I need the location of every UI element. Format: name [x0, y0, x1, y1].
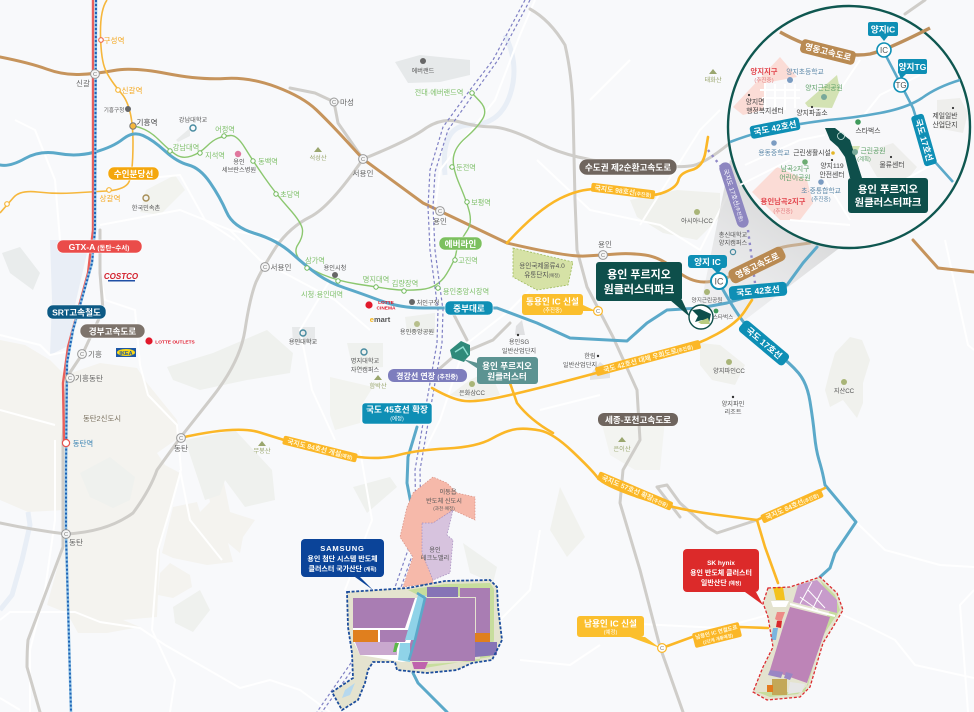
logo: Lotte Outlets — [145, 337, 196, 346]
logo: IKEA — [116, 348, 136, 357]
label: Sejong-Pocheon: 세종-포천고속도로 — [605, 414, 671, 425]
place labels: 리조트 — [724, 408, 742, 416]
interchange text — [69, 79, 612, 547]
Everline — [133, 93, 485, 290]
place labels: 양지근린공원 — [692, 296, 722, 304]
label: Yeongdong expressway — [727, 245, 787, 285]
logo: Costco: COSTCO — [104, 272, 139, 281]
label: Samsung: SAMSUNG — [320, 544, 365, 553]
road text bands — [282, 183, 824, 648]
label: Dongyongin IC: (추진중) — [543, 306, 562, 314]
label: Sejong-Pocheon — [598, 413, 678, 426]
interchange text: 용인 — [433, 216, 447, 226]
inset place labels: 초·중통합학교 — [801, 186, 841, 195]
label: Namyongin IC: 남용인 IC 신설 — [584, 618, 637, 628]
Gyeonggang line extension dashed — [317, 0, 530, 712]
inset place labels: 용동중학교 — [758, 148, 790, 157]
place labels: 아시아나CC — [681, 217, 713, 225]
stations: Everline: 어정역 — [215, 125, 235, 134]
land areas — [0, 55, 870, 633]
inset place labels: 근린공원 — [860, 146, 886, 155]
inset place labels: 물류센터 — [879, 160, 905, 169]
label: GTX-A: GTX-A (동탄~수서) — [69, 242, 129, 252]
logistics complex: 유통단지(예정) — [524, 270, 560, 279]
inset place labels: 용인남곡2지구 — [761, 197, 806, 206]
stations: Everline: 삼가역 — [305, 256, 325, 265]
label: Suin-Bundang line: 수인분당선 — [114, 168, 153, 179]
place labels: 용인 — [233, 159, 245, 166]
interchange text: 서용인 — [353, 168, 373, 178]
Dongtan station — [62, 439, 93, 448]
label: GTX-A — [57, 240, 142, 253]
road label: 84 east: 국지도 84호선(추진중) — [764, 490, 820, 522]
road label: Namyongin link: (2단계 개통예정) — [702, 632, 734, 646]
logo: Emart: emart — [370, 315, 391, 324]
label: SK hynix — [683, 549, 763, 605]
purple dotted road — [708, 150, 755, 283]
inset place labels: 스타벅스 — [855, 126, 881, 135]
label: Jungbu-daero: 중부대로 — [453, 302, 485, 314]
interchange markers: C — [68, 376, 72, 382]
inset place labels: (계획) — [857, 155, 871, 163]
stations: Everline: 명지대역 — [363, 275, 389, 284]
logo: Lotte Cinema: LOTTE — [378, 300, 395, 306]
yellow planned roads — [180, 137, 825, 648]
brand logos — [104, 272, 396, 357]
place labels: 은화삼CC — [459, 389, 486, 397]
label: Route 17 — [737, 319, 791, 367]
inset label: Yangji IC: 양지IC — [871, 24, 895, 34]
inset circle map — [728, 6, 970, 248]
label: SRT — [47, 305, 106, 319]
label: Yangji IC — [688, 255, 727, 274]
label: Namyongin IC: C — [660, 646, 664, 652]
inset place labels: 양지119 — [820, 161, 844, 170]
inset place labels: (추진중) — [811, 195, 831, 203]
road label: 84 west: 국지도 84호선 개설(예정) — [286, 437, 354, 462]
interchange markers: C — [80, 352, 84, 358]
inset marker: IC: IC — [880, 46, 888, 55]
interchange text: 기흥 — [88, 349, 102, 359]
label: main site on map: 용인 푸르지오 — [607, 268, 671, 281]
interchange text: 동탄 — [174, 443, 188, 453]
stations: Everline: 강남대역 — [173, 143, 199, 152]
label: Route 45: 국도 45호선 확장 — [366, 404, 428, 414]
logistics complex — [513, 248, 573, 290]
place labels — [104, 58, 855, 455]
interchange text: 신갈 — [76, 79, 90, 88]
place labels: 스타벅스 — [713, 313, 733, 321]
interchange markers: C — [263, 265, 267, 271]
place labels: 기흥구청 — [104, 106, 124, 114]
logo: Lotte Cinema — [365, 300, 396, 312]
interchange text: 마성 — [340, 98, 354, 107]
place labels: 양지파인 — [722, 400, 745, 408]
place labels: 무봉산 — [253, 447, 271, 455]
stations: Suin-Bundang — [5, 35, 157, 206]
interchange markers: C — [332, 100, 336, 106]
place labels: 양지캠퍼스 — [719, 239, 748, 247]
interchange markers: C — [438, 209, 442, 215]
interchange markers: C — [601, 253, 605, 259]
inset marker: IC — [877, 43, 891, 57]
stations: Everline: 용인중앙시장역 — [443, 287, 489, 296]
inset label: Yangji IC — [868, 22, 898, 41]
inset label: Route 17: 국도 17호선 — [913, 117, 936, 162]
inset label: Yeongdong — [799, 38, 857, 66]
Idong new town zone — [400, 477, 475, 587]
SK hynix cluster site — [753, 577, 843, 700]
label: local road 17 — [718, 161, 750, 229]
place labels: 용인SG — [509, 339, 529, 346]
marker: main site — [689, 305, 713, 329]
place labels: 세브란스병원 — [222, 166, 256, 174]
inset place labels: (추진중) — [773, 207, 793, 215]
label: Route 42: 국도 42호선 — [736, 283, 780, 298]
stations: Everline: 지석역 — [205, 151, 225, 160]
inset marker: TG: TG — [895, 81, 907, 90]
Idong label — [426, 488, 462, 512]
place labels: 총신대학교 — [719, 231, 748, 239]
label: Yangji IC: 양지 IC — [694, 256, 721, 267]
interchange markers — [62, 70, 607, 538]
interchange text: 기흥동탄 — [75, 373, 103, 383]
interchange markers: C — [361, 157, 365, 163]
label: Samsung: 용인 첨단 시스템 반도체 — [307, 554, 378, 563]
label: Gyeonggang extension — [388, 369, 467, 382]
stations: Suin-Bundang: 구성역 — [104, 35, 124, 45]
road label: Namyongin link — [692, 622, 742, 648]
road label: 42 bypass — [595, 340, 701, 376]
inset label: Yeongdong: 영동고속도로 — [804, 40, 853, 63]
label: Yeongdong expressway: 영동고속도로 — [733, 250, 781, 280]
Techno valley zone — [422, 510, 453, 580]
Techno valley label: 용인 — [429, 547, 441, 554]
interchange markers: C — [93, 72, 97, 78]
inset site logo — [838, 132, 844, 140]
interchange text: 용인 — [598, 239, 612, 249]
road label: 42 bypass: 국도 42호선 대체 우회도로(추진중) — [602, 342, 694, 374]
logo: Lotte Outlets: LOTTE OUTLETS — [155, 340, 196, 346]
label: Jungbu-daero — [445, 301, 493, 315]
Idong label: 반도체 신도시 — [426, 497, 462, 505]
place labels: 석성산 — [309, 154, 327, 162]
place labels: 지산CC — [834, 387, 855, 395]
label: Samsung — [301, 539, 384, 590]
inset label: main site: 원클러스터파크 — [855, 196, 922, 209]
stations: Everline: 초당역 — [280, 190, 300, 199]
inset place labels: 안전센터 — [819, 170, 845, 179]
label: Suin-Bundang line — [108, 167, 159, 180]
label: Gyeongbu expressway — [80, 324, 145, 338]
inset label: Route 42: 국도 42호선 — [752, 118, 797, 137]
inset label: Route 17 — [911, 113, 937, 167]
Idong label: 이동읍 — [439, 488, 457, 496]
SRT blue dotted line — [66, 0, 96, 712]
interchange text: 동탄 — [69, 537, 83, 547]
inset place labels: (추진중) — [754, 76, 774, 84]
place labels: 명지대학교 — [351, 357, 380, 365]
label: SK hynix: SK hynix — [707, 560, 735, 567]
brown Yeongdong expressway — [0, 57, 974, 282]
label: Route 42 — [729, 281, 787, 301]
stations: Suin-Bundang: 신갈역 — [122, 85, 142, 95]
place labels: 태화산 — [704, 76, 722, 84]
inset place labels: 양지근린공원 — [805, 83, 843, 92]
inset place labels: 양지지구 — [750, 67, 778, 76]
label: 2nd ring expressway: 수도권 제2순환고속도로 — [585, 162, 671, 172]
cluster small map mark — [450, 341, 492, 378]
inset place labels: 제일일반 — [932, 111, 958, 120]
label: 2nd ring expressway — [579, 159, 677, 175]
logistics complex: 용인국제물류4.0 — [519, 261, 565, 270]
inset label: Yangji TG: 양지TG — [899, 61, 927, 72]
interchange markers: C — [64, 532, 68, 538]
inset land areas — [733, 57, 968, 220]
place labels: 일반산업단지 — [502, 347, 536, 355]
inset white roads — [740, 60, 940, 225]
place labels: 자연캠퍼스 — [351, 366, 380, 374]
label: Gyeonggang extension: 경강선 연장 (추진중) — [396, 371, 458, 381]
inset place labels: 양지파출소 — [796, 108, 828, 117]
place labels: 한국민속촌 — [132, 204, 161, 212]
logo: Lotte Cinema: CINEMA — [377, 306, 396, 312]
Dongtan station: 동탄역 — [73, 439, 93, 448]
road label: Namyongin link: 남용인 IC 연결도로 — [694, 623, 738, 641]
marker: Yangji IC: IC — [714, 276, 724, 286]
inset site pointer — [825, 128, 862, 178]
water — [0, 35, 514, 610]
label: Yongin Prugio cluster: 용인 푸르지오 — [482, 361, 532, 371]
place labels: 용인시청 — [324, 264, 346, 272]
place labels: 에버랜드 — [412, 67, 435, 75]
label: Dongyongin IC: C — [596, 309, 600, 315]
Techno valley label — [421, 547, 449, 562]
inset place labels: 행정복지센터 — [746, 106, 784, 115]
marker: Yangji IC — [711, 273, 727, 289]
road label: 98: 국지도 98호선(추진중) — [594, 183, 652, 199]
label: Route 45 — [362, 403, 432, 424]
label: Namyongin IC: (예정) — [604, 628, 617, 636]
stations: Suin-Bundang: 기흥역 — [137, 117, 157, 127]
inset label: Yangji TG — [898, 59, 927, 79]
label: Yongin Prugio cluster — [477, 357, 538, 384]
inset place labels — [746, 67, 958, 215]
label: Everline: 에버라인 — [445, 238, 476, 249]
place labels: 처인구청 — [417, 299, 439, 307]
inset place labels: 양지초등학교 — [786, 67, 824, 76]
label: Gyeongbu expressway: 경부고속도로 — [89, 326, 136, 336]
place labels: 일반산업단지 — [563, 361, 597, 369]
Idong label: (과천·예정) — [433, 505, 455, 512]
gray wedge to inset — [700, 160, 850, 320]
inset place labels: 남곡2지구 — [781, 164, 809, 173]
place labels: 은이산 — [613, 445, 631, 453]
stations: Everline: 고진역 — [458, 256, 478, 265]
inset label: main site: 용인 푸르지오 — [858, 184, 919, 196]
place labels: 용인대학교 — [289, 338, 318, 346]
interchange text: 동탄2신도시 — [83, 414, 121, 423]
inset place labels: 어린이공원 — [779, 173, 811, 182]
label: Route 17: 국도 17호선 — [744, 324, 785, 361]
Suin-Bundang line — [0, 0, 133, 213]
interchange text: 서용인 — [271, 262, 291, 272]
label: Route 45: (예정) — [390, 414, 404, 422]
GTX-A red line — [63, 0, 93, 443]
label: main site on map — [596, 262, 690, 317]
label: SK hynix: 용인 반도체 클러스터 — [690, 568, 752, 577]
place labels: 강남대학교 — [179, 116, 208, 124]
label: main site on map: 원클러스터파크 — [604, 282, 674, 296]
interchange markers: C — [179, 436, 183, 442]
stations: Everline: 보평역 — [471, 198, 491, 207]
stations: Everline: 김량장역 — [392, 279, 418, 288]
place labels: 양지파인CC — [713, 367, 745, 375]
stations: Everline: 시청·용인대역 — [301, 290, 343, 299]
label: Samsung: 클러스터 국가산단 (계획) — [309, 564, 377, 573]
road label: 57: 국지도 57호선 확장(추진중) — [600, 473, 670, 509]
logo: IKEA: IKEA — [119, 351, 133, 357]
Techno valley label: 테크노밸리 — [421, 554, 449, 562]
label: SRT: SRT고속철도 — [52, 308, 101, 318]
blue roads — [0, 134, 856, 712]
label: Yongin Prugio cluster: 원클러스터 — [487, 370, 527, 382]
inset roads — [780, 28, 930, 55]
stations: Everline: 전대·에버랜드역 — [415, 88, 463, 97]
inset label: main site — [848, 178, 928, 213]
place labels: 한림 — [584, 352, 596, 360]
Samsung cluster site — [332, 580, 502, 710]
label: local road 17: 국지도 17호선 (추진중) — [721, 168, 747, 223]
inset place labels: 근린생활시설 — [793, 148, 831, 157]
stations: Suin-Bundang: 상갈역 — [100, 193, 120, 203]
label: Everline — [439, 237, 482, 250]
inset place labels: 양지면 — [746, 97, 764, 106]
road label: 84 east — [760, 488, 824, 524]
stations: Everline — [168, 88, 491, 299]
label: Namyongin IC — [577, 616, 666, 652]
inset marker: TG — [894, 78, 908, 92]
stations: Everline: 둔전역 — [456, 163, 476, 172]
label: Dongyongin IC — [522, 294, 602, 315]
label: Dongyongin IC: 동용인 IC 신설 — [526, 296, 579, 306]
label: SK hynix: 일반산단 (예정) — [701, 578, 741, 587]
inset place labels: 산업단지 — [932, 120, 958, 129]
stations: Everline: 동백역 — [258, 157, 278, 166]
place labels: 용인중앙공원 — [400, 328, 434, 336]
place labels: 함박산 — [369, 382, 387, 390]
